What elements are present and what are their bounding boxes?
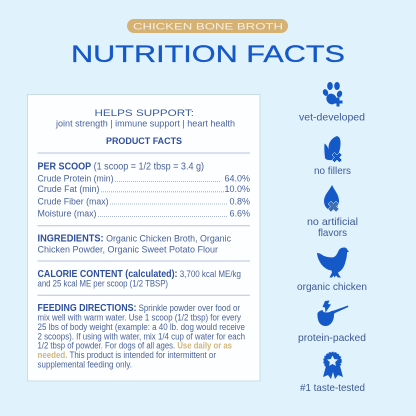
calorie content: and 25 kcal ME per scoop (1/2 TBSP) <box>38 279 168 289</box>
feeding directions: supplemental feeding only. <box>38 359 132 369</box>
label <box>307 216 358 239</box>
badge: protein-packed <box>298 300 366 344</box>
label: organic chicken <box>297 281 367 293</box>
icon: award ribbon <box>323 352 343 379</box>
label: #1 taste-tested <box>300 382 365 394</box>
facts table: 64.0% <box>224 174 250 184</box>
badge: vet-developed <box>299 82 365 124</box>
icon: chicken <box>317 248 349 278</box>
facts table: Moisture (max) <box>38 209 96 219</box>
facts table: Crude Fat (min) <box>38 184 100 194</box>
ingredients: Chicken Powder, Organic Sweet Potato Flour <box>38 244 219 255</box>
feeding directions: needed. This product is intended for intermittent or <box>38 350 216 360</box>
panel: nutrition card <box>28 94 260 381</box>
calorie content <box>38 269 241 289</box>
icon: drop with cross <box>324 185 339 212</box>
feeding directions: 25 lbs of body weight (example: a 40 lb. dog would receive <box>38 322 245 332</box>
icon: scoop with bolt <box>317 300 348 326</box>
badge: #1 taste-tested <box>300 352 365 394</box>
per scoop heading: PER SCOOP (1 scoop = 1/2 tbsp = 3.4 g) <box>38 162 204 172</box>
label: flavors <box>318 227 347 239</box>
badge: no fillers <box>314 136 351 177</box>
facts table: Crude Fiber (max) <box>38 196 109 206</box>
badge: organic chicken <box>297 248 367 293</box>
facts table: 6.6% <box>229 209 250 219</box>
label: no fillers <box>314 165 351 177</box>
ingredients <box>38 234 231 255</box>
icon: corn with cross <box>324 136 342 162</box>
benefits line: joint strength | immune support | heart health <box>55 119 235 129</box>
feeding directions: 2 scoops). If using with water, mix 1/4 cup of water for each <box>38 331 245 341</box>
feeding directions: 1/2 tbsp of powder. For dogs of all ages. Use daily or as <box>38 341 232 351</box>
badge: no artificial flavors <box>307 185 358 239</box>
label: protein-packed <box>298 332 366 344</box>
pill label: chicken bone broth: CHICKEN BONE BROTH <box>133 22 283 33</box>
facts table: Crude Protein (min) <box>38 174 114 184</box>
facts table: 10.0% <box>224 184 250 194</box>
title: NUTRITION FACTS <box>71 41 345 68</box>
feeding directions: FEEDING DIRECTIONS: Sprinkle powder over food or <box>38 303 240 314</box>
pill label: chicken bone broth <box>127 19 288 33</box>
calorie content: CALORIE CONTENT (calculated): 3,700 kcal ME/kg <box>38 269 241 280</box>
feeding directions <box>38 303 245 369</box>
label: vet-developed <box>299 112 365 124</box>
label: no artificial <box>307 216 358 228</box>
feeding directions: mix well with warm water. Use 1 scoop (1/2 tbsp) for every <box>38 312 241 322</box>
facts table: 0.8% <box>229 196 250 206</box>
icon: paw with plus <box>322 82 343 106</box>
facts table <box>38 174 250 219</box>
ingredients: INGREDIENTS: Organic Chicken Broth, Organic <box>38 234 231 245</box>
product facts heading: PRODUCT FACTS <box>106 136 182 147</box>
helps support heading: HELPS SUPPORT: <box>94 108 194 119</box>
